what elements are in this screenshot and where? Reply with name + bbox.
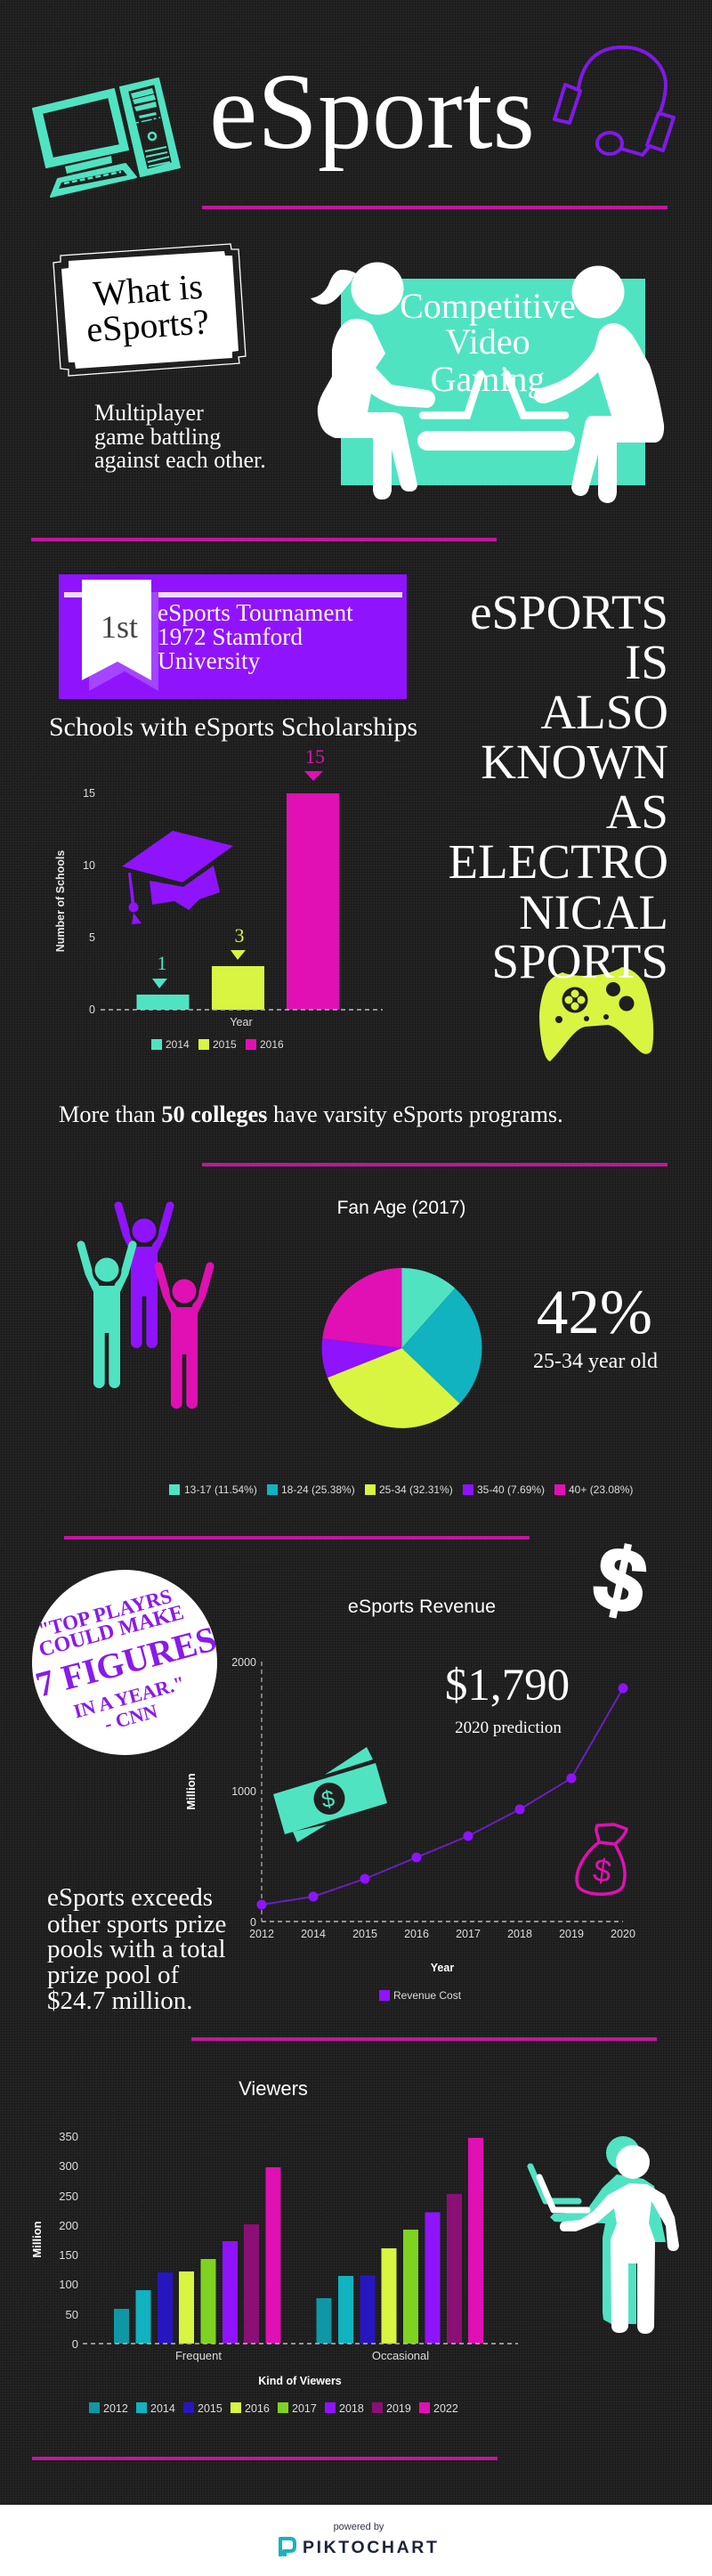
legend: viewers: 2015 xyxy=(198,2402,222,2415)
bar chart: viewers: 300 xyxy=(59,2159,78,2173)
legend: 2016 xyxy=(260,1038,284,1051)
callout: 42 percent: 25-34 year old xyxy=(533,1350,658,1373)
card: what is esports: eSports? xyxy=(85,301,210,350)
legend: fan age xyxy=(169,1483,633,1496)
text: definition: Multiplayer xyxy=(94,400,204,426)
line chart: esports revenue: 2019 xyxy=(559,1928,584,1940)
legend: viewers: 2019 xyxy=(386,2402,411,2415)
icon: banknotes xyxy=(273,1747,387,1842)
bar chart: viewers: 50 xyxy=(66,2308,78,2321)
line chart: esports revenue: 2018 xyxy=(507,1928,532,1940)
bar chart: viewers: 0 xyxy=(72,2337,78,2351)
icon: money bag xyxy=(577,1824,627,1894)
card: what is esports: What is xyxy=(92,266,204,313)
callout: 2020 prediction: $1,790 xyxy=(445,1661,570,1711)
callout: 2020 prediction: 2020 prediction xyxy=(455,1719,562,1737)
line chart: esports revenue: 0 xyxy=(250,1916,256,1929)
text: prize pools: prize pool of xyxy=(47,1961,180,1989)
callout: top players quote: "TOP PLAYRS xyxy=(36,1585,174,1642)
text: also known as: AS xyxy=(606,784,668,839)
line chart: esports revenue: 2016 xyxy=(404,1928,429,1940)
bar chart: schools with scholarships: Number of Schools xyxy=(54,850,67,952)
bar chart: viewers: Occasional xyxy=(372,2349,429,2362)
bar chart: schools with scholarships: Year xyxy=(230,1016,253,1028)
footer: PIKTOCHART xyxy=(303,2538,439,2557)
text: also known as: SPORTS xyxy=(492,934,668,988)
text: definition: game battling xyxy=(94,424,221,450)
title: eSports xyxy=(209,52,535,172)
bar chart: viewers: 350 xyxy=(59,2130,78,2143)
text: also known as: IS xyxy=(625,635,668,689)
line chart: esports revenue: 2000 xyxy=(231,1656,256,1669)
bar chart: schools with scholarships: 10 xyxy=(83,859,95,872)
legend: fan age: 25-34 (32.31%) xyxy=(379,1483,453,1496)
bar chart: schools with scholarships: 5 xyxy=(89,931,95,944)
legend xyxy=(151,1038,284,1051)
line chart: esports revenue: Year xyxy=(431,1962,454,1974)
line chart: esports revenue: 1000 xyxy=(231,1785,256,1798)
icon: banknotes: $ xyxy=(320,1784,337,1813)
footer xyxy=(0,2505,712,2576)
icon: game controller xyxy=(539,967,653,1061)
text: prize pools: $24.7 million. xyxy=(47,1987,193,2015)
text: competitive video gaming: Competitive xyxy=(400,286,576,326)
bar chart: viewers: Frequent xyxy=(175,2349,222,2362)
magenta fan xyxy=(158,1266,210,1409)
panel: first tournament banner xyxy=(59,574,407,699)
icon: ribbon xyxy=(82,580,158,691)
callout: 2020 prediction xyxy=(445,1661,570,1737)
legend: viewers: 2017 xyxy=(292,2402,317,2415)
text: also known as: ELECTRO xyxy=(449,834,668,889)
icon: graduation cap xyxy=(122,831,233,924)
callout: top players quote: - CNN xyxy=(102,1700,160,1735)
heading: fan age: Fan Age (2017) xyxy=(337,1198,465,1218)
teal fan xyxy=(81,1245,133,1388)
text: tournament: eSports Tournament xyxy=(158,599,353,626)
text: also known as: NICAL xyxy=(519,885,668,939)
legend: fan age: 18-24 (25.38%) xyxy=(281,1483,355,1496)
purple fan xyxy=(118,1206,170,1348)
text: prize pools: eSports exceeds xyxy=(47,1883,213,1912)
line chart: esports revenue: 2012 xyxy=(249,1928,274,1940)
line chart: esports revenue: 2020 xyxy=(611,1928,635,1940)
bar chart: schools with scholarships: 3 xyxy=(235,924,244,947)
bar chart: viewers: 250 xyxy=(59,2190,78,2203)
line chart: esports revenue: 2017 xyxy=(456,1928,481,1940)
icon: headset xyxy=(554,47,674,155)
callout: 42 percent: 42% xyxy=(537,1278,652,1347)
text: also known as: eSPORTS xyxy=(470,585,668,639)
text: also known as: KNOWN xyxy=(481,735,668,789)
line chart: esports revenue: 2015 xyxy=(352,1928,377,1940)
card: what is esports xyxy=(53,244,246,376)
icon: person with laptop xyxy=(530,2136,679,2334)
icon: money bag: $ xyxy=(591,1851,614,1889)
legend: fan age: 13-17 (11.54%) xyxy=(184,1483,257,1496)
legend: fan age: 40+ (23.08%) xyxy=(569,1483,633,1496)
callout: top players quote xyxy=(31,1570,221,1755)
heading: schools with scholarships: Schools with eSports Scholarships xyxy=(49,712,417,742)
bar chart: schools with scholarships: 1 xyxy=(157,952,167,974)
legend: fan age: 35-40 (7.69%) xyxy=(477,1483,545,1496)
text: prize pools: pools with a total xyxy=(47,1935,226,1963)
bar chart: viewers: Kind of Viewers xyxy=(258,2375,342,2387)
legend: viewers: 2022 xyxy=(433,2402,458,2415)
text: 50 colleges: More than 50 colleges have varsity eSports programs. xyxy=(59,1101,563,1127)
callout: 42 percent xyxy=(533,1278,658,1373)
bar chart: schools with scholarships: 0 xyxy=(89,1004,95,1016)
icon: piktochart logo xyxy=(280,2539,295,2556)
heading: viewers: Viewers xyxy=(239,2077,308,2100)
icon: cheering fans xyxy=(81,1206,210,1409)
legend: revenue cost: Revenue Cost xyxy=(393,1989,462,2002)
icon: desktop computer xyxy=(33,78,180,197)
line chart: esports revenue: Million xyxy=(184,1773,198,1810)
legend: viewers: 2016 xyxy=(245,2402,270,2415)
text: competitive video gaming: Gaming xyxy=(431,359,545,399)
bar chart: viewers xyxy=(30,2130,518,2415)
icon: dollar sign: $ xyxy=(586,1526,655,1634)
text: competitive video gaming: Video xyxy=(445,321,530,362)
text: definition: against each other. xyxy=(94,447,266,473)
icon: ribbon: 1st xyxy=(101,609,138,645)
bar chart: schools with scholarships: 15 xyxy=(83,787,95,800)
legend: 2015 xyxy=(213,1038,237,1051)
bar chart: viewers: 150 xyxy=(59,2248,78,2262)
line chart: esports revenue xyxy=(184,1656,635,2002)
bar chart: viewers: 100 xyxy=(59,2278,78,2291)
bar chart: schools with scholarships: 15 xyxy=(305,745,325,768)
text: also known as: ALSO xyxy=(540,685,668,739)
pie chart: fan age xyxy=(322,1268,481,1428)
callout: top players quote: IN A YEAR." xyxy=(71,1671,187,1722)
icon: two players at table xyxy=(311,262,664,503)
callout: top players quote: COULD MAKE xyxy=(36,1601,186,1662)
legend: viewers: 2018 xyxy=(339,2402,364,2415)
panel: what is esports xyxy=(53,244,266,473)
legend: viewers xyxy=(89,2402,458,2415)
callout: top players quote: 7 FIGURES xyxy=(31,1618,221,1705)
text: tournament: University xyxy=(158,647,261,674)
legend: viewers: 2012 xyxy=(103,2402,128,2415)
bar chart: schools with scholarships xyxy=(54,745,383,1051)
panel: competitive video gaming xyxy=(311,262,664,503)
bar chart: viewers: 200 xyxy=(59,2219,78,2232)
legend: 2014 xyxy=(166,1038,190,1051)
text: prize pools: other sports prize xyxy=(47,1910,226,1938)
heading: esports revenue: eSports Revenue xyxy=(348,1596,496,1617)
footer: powered by xyxy=(334,2522,384,2532)
line chart: esports revenue: 2014 xyxy=(301,1928,326,1940)
bar chart: viewers: Million xyxy=(30,2221,44,2258)
text: tournament: 1972 Stamford xyxy=(158,623,303,650)
legend: viewers: 2014 xyxy=(150,2402,175,2415)
